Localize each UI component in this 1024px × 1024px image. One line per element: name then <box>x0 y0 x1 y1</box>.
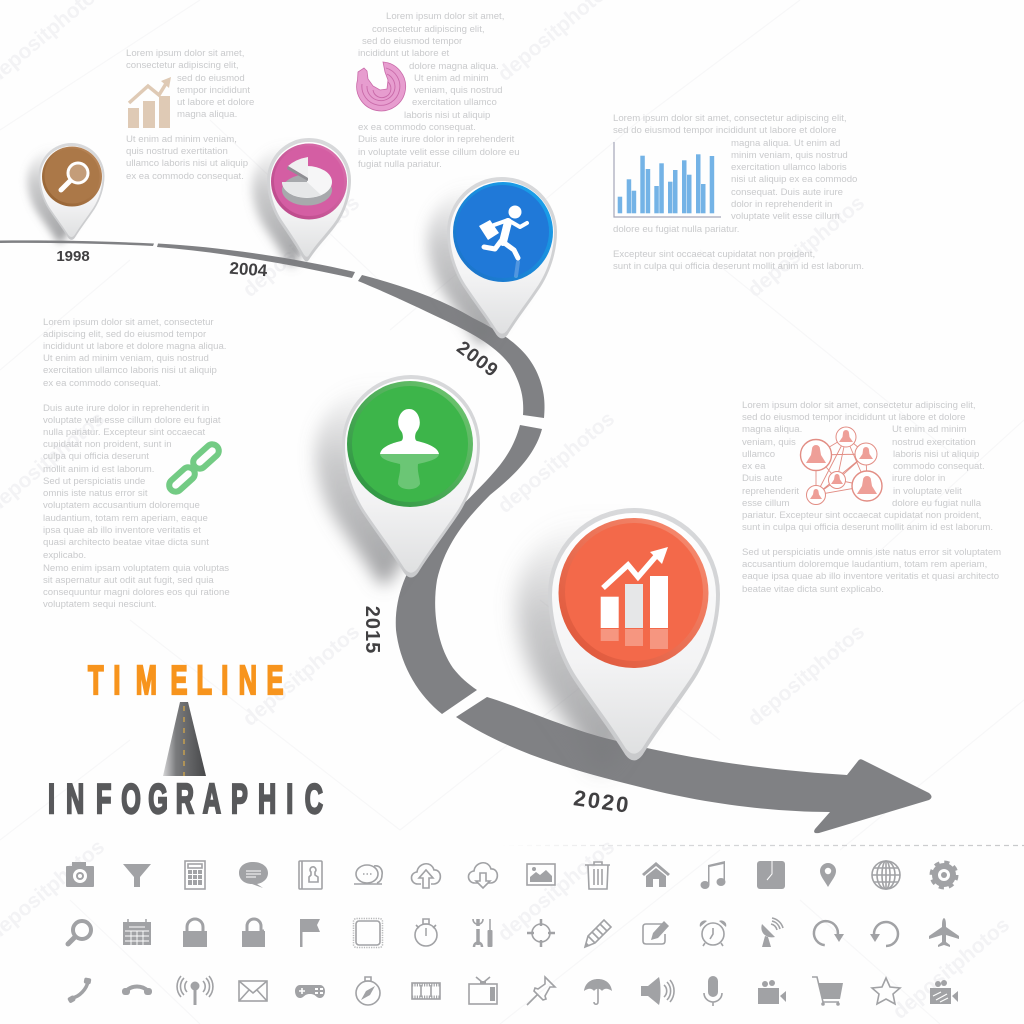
text block left column: quasi architecto beatae vitae dicta sunt <box>43 537 209 548</box>
text block left column: exercitation ullamco laboris nisi ut aliquip <box>43 365 217 376</box>
text block left column: voluptatem accusantium doloremque <box>43 500 200 511</box>
text block 2009 <box>613 113 864 272</box>
icon: telephone <box>67 977 91 1004</box>
text block left column: laudantium, totam rem aperiam, eaque <box>43 513 208 524</box>
icon: people network <box>800 427 882 504</box>
text block right column: pariatur. Excepteur sint occaecat cupidatat non proident, <box>742 510 981 521</box>
icon: gear <box>932 862 956 888</box>
icon: textured video camera <box>930 980 958 1004</box>
text block 2009: Lorem ipsum dolor sit amet, consectetur adipiscing elit, <box>613 113 847 124</box>
icon: film strip <box>412 983 440 999</box>
icon: pie chart <box>282 157 332 206</box>
icon: shopping cart <box>812 977 843 1006</box>
text block 1998: Ut enim ad minim veniam, <box>126 134 237 145</box>
icon: contact book <box>299 861 322 889</box>
text block 2004: Ut enim ad minim <box>414 73 489 84</box>
icon: pink spiral pie <box>357 62 406 111</box>
icon: green chain link <box>167 442 221 494</box>
text block left column: Lorem ipsum dolor sit amet, consectetur <box>43 317 214 328</box>
text block right column: in voluptate velit <box>893 486 962 497</box>
icon: chip <box>354 918 382 948</box>
icon: video camera <box>758 980 786 1004</box>
road segment 2015 <box>396 425 542 714</box>
icon: calculator <box>185 861 205 889</box>
text block 2004: consectetur adipiscing elit, <box>372 24 485 35</box>
text block right column: magna aliqua. <box>742 424 802 435</box>
text block left column: ex ea commodo consequat. <box>43 378 161 389</box>
icon: map pin <box>820 863 836 887</box>
icon: tools <box>473 919 492 947</box>
icon: camera <box>66 862 94 887</box>
text: depositphotos <box>493 407 619 518</box>
icon: hang up <box>122 986 152 995</box>
text block 1998: quis nostrud exertitation <box>126 146 228 157</box>
text block right column: veniam, quis <box>742 437 796 448</box>
year 1998: 1998 <box>56 248 90 265</box>
road timeline arrow <box>0 240 932 833</box>
pin 1998: magnifier <box>27 143 104 243</box>
icon: edit note <box>643 921 669 944</box>
road segment 2004 <box>157 244 355 278</box>
text block 2004: sed do eiusmod tempor <box>362 36 463 47</box>
text block 2009: minim veniam, quis nostrud <box>731 150 848 161</box>
text block 1998 <box>126 48 254 182</box>
text block right column: sed do eiusmod tempor incididunt ut labore et dolore <box>742 412 965 423</box>
road segment 2009 <box>358 275 545 418</box>
icon: envelope <box>239 981 267 1001</box>
text block 1998: ex ea commodo consequat. <box>126 171 244 182</box>
text block 1998: ullamco laboris nisi ut aliquip <box>126 158 248 169</box>
text: depositphotos <box>238 191 364 302</box>
text block 2004: incididunt ut labore et <box>358 48 450 59</box>
icon: funnel <box>123 864 151 887</box>
icon: open lock <box>242 919 265 947</box>
text block left column: voluptate velit esse cillum dolore eu fugiat <box>43 415 221 426</box>
text: depositphotos <box>743 620 869 731</box>
text block left column <box>43 317 230 610</box>
text block left column: Ut enim ad minim veniam, quis nostrud <box>43 353 209 364</box>
text block left column: consequuntur magni dolores eos qui ratione <box>43 587 230 598</box>
icon: bars and rising arrow <box>601 547 668 649</box>
text block 2009: dolore eu fugiat nulla pariatur. <box>613 224 739 235</box>
icon: chat bubbles <box>354 865 382 884</box>
icon: speech bubble <box>239 862 268 888</box>
text block right column: nostrud exercitation <box>892 437 976 448</box>
icon: flag <box>300 919 320 947</box>
text block right column: ullamco <box>742 449 775 460</box>
text block 1998: Lorem ipsum dolor sit amet, <box>126 48 244 59</box>
text block right column: irure dolor in <box>892 473 945 484</box>
text block left column: ipsa quae ab illo inventore veritatis et <box>43 525 201 536</box>
icon: lock <box>183 919 207 947</box>
icon: globe <box>872 861 900 889</box>
icon: microphone <box>704 976 722 1006</box>
icon: music <box>700 861 726 889</box>
text block 2004: in voluptate velit esse cillum dolore eu <box>358 147 520 158</box>
text block 2009: magna aliqua. Ut enim ad <box>731 138 840 149</box>
text block right column: dolore eu fugiat nulla <box>892 498 982 509</box>
text block right column: accusantium doloremque laudantium, totam rem aperiam, <box>742 559 987 570</box>
icon: magnifier <box>61 163 88 190</box>
icon: calendar <box>123 919 151 945</box>
text block left column: cupidatat non proident, sunt in <box>43 439 172 450</box>
pin 2009: runner <box>427 177 557 344</box>
text block 2009: exercitation ullamco laboris <box>731 162 847 173</box>
text block left column: nulla pariatur. Excepteur sint occaecat <box>43 427 205 438</box>
text block 2009: Excepteur sint occaecat cupidatat non proident, <box>613 249 815 260</box>
text block right column: Ut enim ad minim <box>892 424 967 435</box>
icon: picture <box>527 864 555 885</box>
icon: clock tile <box>757 861 785 889</box>
text block right column: ex ea <box>742 461 766 472</box>
text block left column: sit aspernatur aut odit aut fugit, sed quia <box>43 575 214 586</box>
text: depositphotos <box>238 620 364 731</box>
icon: stopwatch <box>415 919 437 946</box>
text block right column: Lorem ipsum dolor sit amet, consectetur adipiscing elit, <box>742 400 976 411</box>
year 2009: 2009 <box>453 337 502 382</box>
road segment 1998 <box>0 240 154 246</box>
text block 2004: laboris nisi ut aliquip <box>404 110 490 121</box>
text block right column <box>742 400 1001 595</box>
pin 2020: growth chart <box>516 508 720 768</box>
text block 2009: nisi ut aliquip ex ea commodo <box>731 174 857 185</box>
text block 2004 <box>358 11 520 170</box>
year 2015: 2015 <box>361 606 383 654</box>
text block 2004: dolore magna aliqua. <box>409 61 499 72</box>
icon: star <box>872 978 900 1004</box>
text block left column: explicabo. <box>43 550 86 561</box>
text block 2004: fugiat nulla pariatur. <box>358 159 442 170</box>
icon: home <box>642 862 670 887</box>
text block left column: Nemo enim ipsam voluptatem quia voluptas <box>43 563 229 574</box>
icon: pencil <box>585 920 611 947</box>
icon: compass <box>356 977 380 1005</box>
text block 1998: magna aliqua. <box>177 109 237 120</box>
bar chart <box>614 142 721 217</box>
icon: tan growth bars <box>128 77 171 128</box>
text block left column: culpa qui officia deserunt <box>43 451 149 462</box>
text block left column: Sed ut perspiciatis unde <box>43 476 145 487</box>
icon: television <box>469 977 497 1004</box>
icon: magnifier small <box>68 921 91 944</box>
icon: cloud download <box>468 863 497 888</box>
text block 2004: ex ea commodo consequat. <box>358 122 476 133</box>
icon: antenna <box>177 976 213 1005</box>
icon: target <box>527 919 555 947</box>
title: INFOGRAPHIC: INFOGRAPHIC <box>48 777 323 823</box>
icon: push pin <box>527 977 555 1005</box>
text block 2009: sunt in culpa qui officia deserunt mollit anim id est laborum. <box>613 261 864 272</box>
year 2004: 2004 <box>229 259 268 280</box>
text block right column: Duis aute <box>742 473 783 484</box>
icon: alarm clock <box>700 920 726 946</box>
text: depositphotos <box>493 835 619 946</box>
text block left column: mollit anim id est laborum. <box>43 464 154 475</box>
text block 1998: ut labore et dolore <box>177 97 254 108</box>
text block 1998: consectetur adipiscing elit, <box>126 60 239 71</box>
text block 2009: voluptate velit esse cillum <box>731 211 840 222</box>
text block right column: sunt in culpa qui officia deserunt mollit anim id est laborum. <box>742 522 993 533</box>
text block left column: voluptatem sequi nesciunt. <box>43 599 157 610</box>
icon: speaker <box>641 977 674 1005</box>
year 2020: 2020 <box>572 785 632 818</box>
text block left column: omnis iste natus error sit <box>43 488 148 499</box>
icon: game controller <box>295 985 325 998</box>
text: depositphotos <box>888 913 1014 1024</box>
title: TIMELINE: TIMELINE <box>88 658 284 704</box>
text block 1998: sed do eiusmod <box>177 73 245 84</box>
text block right column: esse cillum <box>742 498 789 509</box>
icon: undo <box>870 922 898 946</box>
icon grid <box>66 861 959 1006</box>
icon: running man with briefcase <box>479 206 527 276</box>
text block right column: laboris nisi ut aliquip <box>893 449 979 460</box>
text block right column: commodo consequat. <box>893 461 985 472</box>
icon: umbrella <box>584 979 612 1004</box>
text block 2009: consequat. Duis aute irure <box>731 187 843 198</box>
icon: satellite dish <box>761 918 783 947</box>
text block 2004: veniam, quis nostrud <box>414 85 503 96</box>
text block left column: adipiscing elit, sed do eiusmod tempor <box>43 329 207 340</box>
text block 2009: sed do eiusmod tempor incididunt ut labore et dolore <box>613 125 836 136</box>
text: depositphotos <box>743 191 869 302</box>
text block 2004: Duis aute irure dolor in reprehenderit <box>358 134 515 145</box>
icon: trash can <box>585 862 610 889</box>
text block right column: beatae vitae dicta sunt explicabo. <box>742 584 884 595</box>
text block 2009: dolor in reprehenderit in <box>731 199 832 210</box>
icon: redo <box>811 918 844 948</box>
pin 2015: person stamp <box>315 375 480 585</box>
icon: person bust with reflection <box>380 409 439 489</box>
text block 1998: tempor incididunt <box>177 85 250 96</box>
text block left column: incididunt ut labore et dolore magna aliqua. <box>43 341 226 352</box>
text block 2004: Lorem ipsum dolor sit amet, <box>386 11 504 22</box>
pin 2004: pie chart <box>252 138 351 267</box>
text block right column: Sed ut perspiciatis unde omnis iste natus error sit voluptatem <box>742 547 1001 558</box>
text block 2004: exercitation ullamco <box>412 97 497 108</box>
text block left column: Duis aute irure dolor in reprehenderit in <box>43 403 209 414</box>
road segment 2020 with arrow head <box>456 697 932 833</box>
text block right column: reprehenderit <box>742 486 799 497</box>
icon: small road <box>163 702 206 776</box>
icon: airplane <box>929 918 959 947</box>
icon: cloud upload <box>411 864 440 888</box>
text block right column: eaque ipsa quae ab illo inventore veritatis et quasi architecto <box>742 571 999 582</box>
